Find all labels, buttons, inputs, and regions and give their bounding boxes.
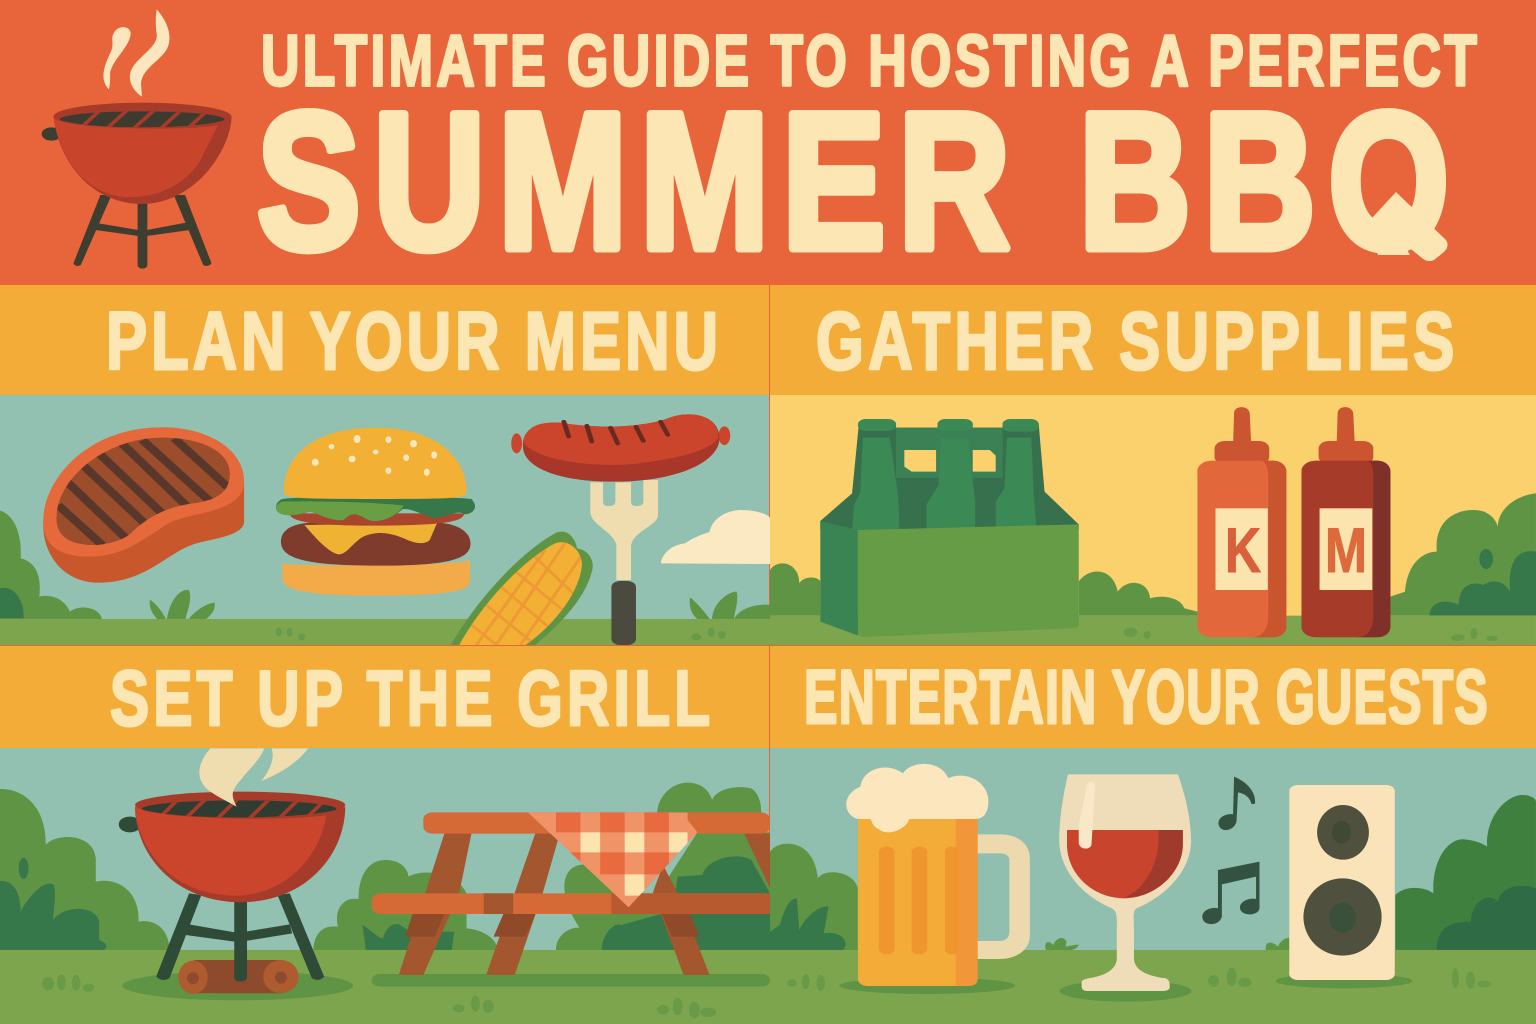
heading band: gather supplies	[770, 285, 1536, 395]
label letter: K: K	[1225, 516, 1261, 586]
grass tufts behind	[150, 590, 770, 619]
panel: entertain your guests	[770, 646, 1536, 1024]
heading band: set up the grill	[0, 646, 769, 748]
scene: gather supplies illustrations	[770, 407, 1536, 645]
heading band: entertain your guests	[770, 646, 1536, 748]
icon: fork	[590, 480, 658, 645]
header band	[0, 0, 1536, 285]
icon: cloud	[661, 510, 770, 564]
title: line one: ULTIMATE GUIDE TO HOSTING A PERFECT	[261, 22, 1477, 101]
icon: burger	[276, 428, 475, 596]
title: Q tail	[1372, 192, 1448, 261]
heading: plan your menu: PLAN YOUR MENU	[106, 295, 718, 387]
scene: set up the grill illustrations	[0, 748, 770, 1024]
icon: corn	[451, 532, 593, 648]
bushes	[770, 493, 1536, 616]
icon: mustard bottle	[1301, 407, 1390, 637]
label letter: M: M	[1325, 516, 1367, 586]
ground	[770, 950, 1536, 1024]
icon: ketchup bottle	[1197, 407, 1286, 637]
scene: entertain your guests illustrations	[770, 764, 1536, 1024]
icon: music notes	[1202, 777, 1259, 924]
grass marks	[42, 974, 716, 1018]
icon: six pack of bottles	[820, 419, 1079, 637]
icon: grill with smoke	[119, 748, 353, 1000]
panel: set up the grill	[0, 646, 770, 1024]
scene: plan your menu illustrations	[0, 414, 770, 648]
heading: gather supplies: GATHER SUPPLIES	[816, 295, 1454, 387]
grass marks	[276, 627, 726, 641]
heading: set up the grill: SET UP THE GRILL	[110, 655, 710, 742]
title block	[258, 33, 1478, 262]
grass marks	[787, 968, 1491, 991]
bush left	[0, 511, 102, 619]
title: line two: SUMMER BBQ	[257, 74, 1449, 290]
heading: entertain your guests: ENTERTAIN YOUR GUESTS	[804, 655, 1488, 740]
ground	[770, 616, 1536, 645]
icon: header grill	[42, 9, 232, 269]
grass marks	[1124, 628, 1498, 641]
icon: wine glass	[1059, 774, 1192, 1002]
ground	[0, 950, 770, 1024]
icon: speaker	[1276, 785, 1412, 988]
bushes	[770, 795, 1536, 950]
ground	[0, 619, 770, 645]
icon: beer mug	[839, 764, 1030, 994]
icon: steak	[43, 427, 244, 583]
icon: picnic table	[372, 812, 770, 987]
panel: plan your menu	[0, 285, 770, 648]
panel: gather supplies	[770, 285, 1536, 645]
bushes	[0, 783, 770, 950]
icon: sausage	[511, 414, 730, 482]
heading band: plan your menu	[0, 285, 769, 395]
